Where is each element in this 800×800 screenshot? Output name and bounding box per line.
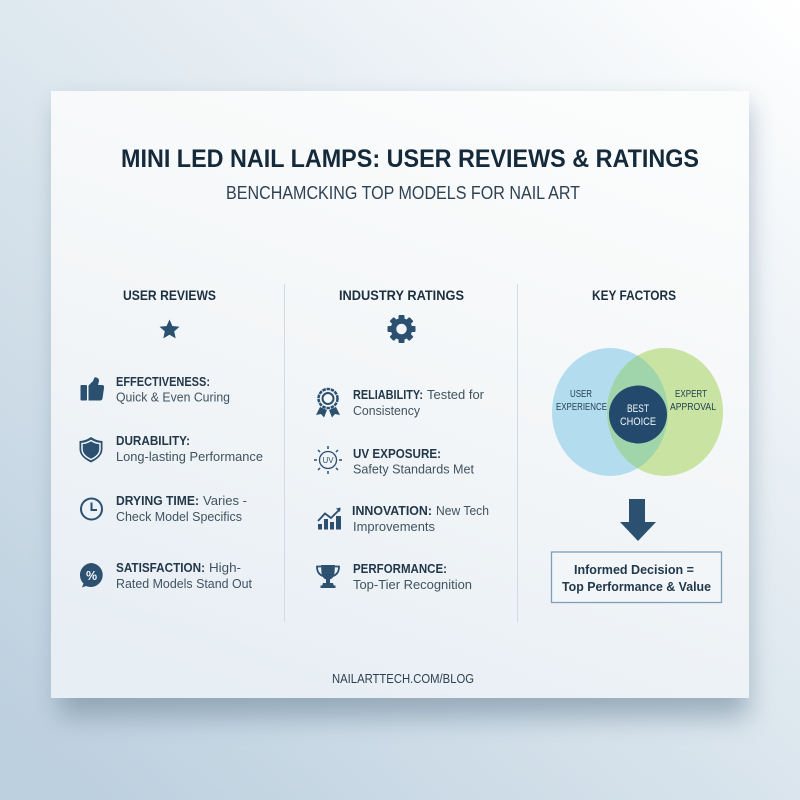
text: satisfaction: Rated Models Stand Out: [116, 577, 253, 591]
panel: key factors: [552, 287, 723, 602]
text: performance: PERFORMANCE:: [353, 562, 447, 576]
circle: expert approval: [607, 348, 723, 476]
panel: user reviews: [80, 287, 263, 591]
label: expert approval: APPROVAL: [670, 401, 716, 413]
label: user experience: [556, 388, 607, 413]
text: innovation: INNOVATION:: [352, 504, 432, 518]
overlap: [607, 356, 668, 468]
callout: informed decision: [552, 552, 722, 602]
icon: gear: [388, 315, 416, 343]
text: reliability: Consistency: [353, 404, 421, 418]
review item: satisfaction: [80, 561, 253, 591]
label: expert approval: [670, 388, 716, 413]
callout: informed decision: Top Performance & Value: [562, 580, 711, 594]
icon: percent speech bubble: [80, 563, 103, 588]
icon: clock: [81, 498, 102, 520]
rating item: performance: [317, 562, 472, 592]
heading: user reviews: USER REVIEWS: [123, 287, 216, 303]
title: MINI LED NAIL LAMPS: USER REVIEWS & RATINGS: [121, 145, 699, 173]
label: user experience: USER: [570, 388, 592, 400]
text: uv exposure: UV EXPOSURE:: [353, 447, 441, 461]
text: satisfaction: SATISFACTION:: [116, 561, 205, 575]
review item: effectiveness: [80, 375, 230, 404]
text: drying time: Check Model Specifics: [116, 510, 242, 524]
icon: award ribbon: [316, 389, 340, 418]
icon: uv sun: UV: [322, 456, 334, 465]
text: performance: [353, 562, 472, 592]
card shadow: [58, 105, 748, 717]
text: uv exposure: Safety Standards Met: [353, 462, 475, 476]
subtitle: BENCHAMCKING TOP MODELS FOR NAIL ART: [226, 183, 580, 203]
rating item: reliability: [316, 388, 484, 418]
label: best choice: [620, 403, 656, 428]
panel: industry ratings: [314, 287, 489, 592]
text: durability: Long-lasting Performance: [116, 450, 263, 464]
text: innovation: [352, 504, 489, 534]
heading: industry ratings: INDUSTRY RATINGS: [339, 287, 464, 303]
text: satisfaction: [116, 561, 253, 591]
label: user experience: EXPERIENCE: [556, 401, 607, 413]
icon: growth chart: [318, 508, 341, 530]
divider 2: [517, 284, 518, 622]
text: reliability: Tested for: [427, 388, 484, 402]
text: effectiveness: Quick & Even Curing: [116, 390, 230, 404]
text: drying time: DRYING TIME:: [116, 494, 199, 508]
icon: uv sun: [314, 446, 342, 474]
label: expert approval: EXPERT: [675, 388, 707, 400]
icon: trophy: [317, 565, 339, 588]
review item: drying time: [81, 494, 247, 524]
text: durability: DURABILITY:: [116, 434, 190, 448]
rating item: innovation: [318, 504, 489, 534]
circle: user experience: [552, 348, 668, 476]
text: innovation: New Tech: [436, 504, 489, 518]
label: best choice: BEST: [627, 403, 649, 415]
text: durability: [116, 434, 263, 464]
divider 1: [284, 284, 285, 622]
arrow: down: [620, 499, 656, 541]
footer url: NAILARTTECH.COM/BLOG: [332, 672, 474, 686]
text: innovation: Improvements: [353, 520, 435, 534]
venn diagram: [552, 348, 723, 476]
icon: thumbs up: [80, 377, 104, 400]
text: effectiveness: [116, 375, 230, 404]
text: reliability: [353, 388, 484, 418]
review item: durability: [80, 434, 263, 464]
text: performance: Top-Tier Recognition: [353, 578, 472, 592]
text: reliability: RELIABILITY:: [353, 388, 423, 402]
text: uv exposure: [353, 447, 475, 476]
label: best choice: CHOICE: [620, 416, 656, 428]
card panel: [51, 91, 749, 698]
text: satisfaction: High-: [209, 561, 241, 575]
icon: shield: [80, 437, 102, 462]
text: drying time: [116, 494, 247, 524]
icon: star: [160, 320, 180, 338]
center circle: best choice: [609, 386, 667, 444]
text: effectiveness: EFFECTIVENESS:: [116, 375, 210, 389]
callout: informed decision: Informed Decision =: [574, 563, 694, 577]
icon: percent speech bubble: %: [86, 569, 97, 583]
heading: key factors: KEY FACTORS: [592, 287, 676, 303]
text: drying time: Varies -: [203, 494, 247, 508]
rating item: uv exposure: [314, 446, 475, 476]
